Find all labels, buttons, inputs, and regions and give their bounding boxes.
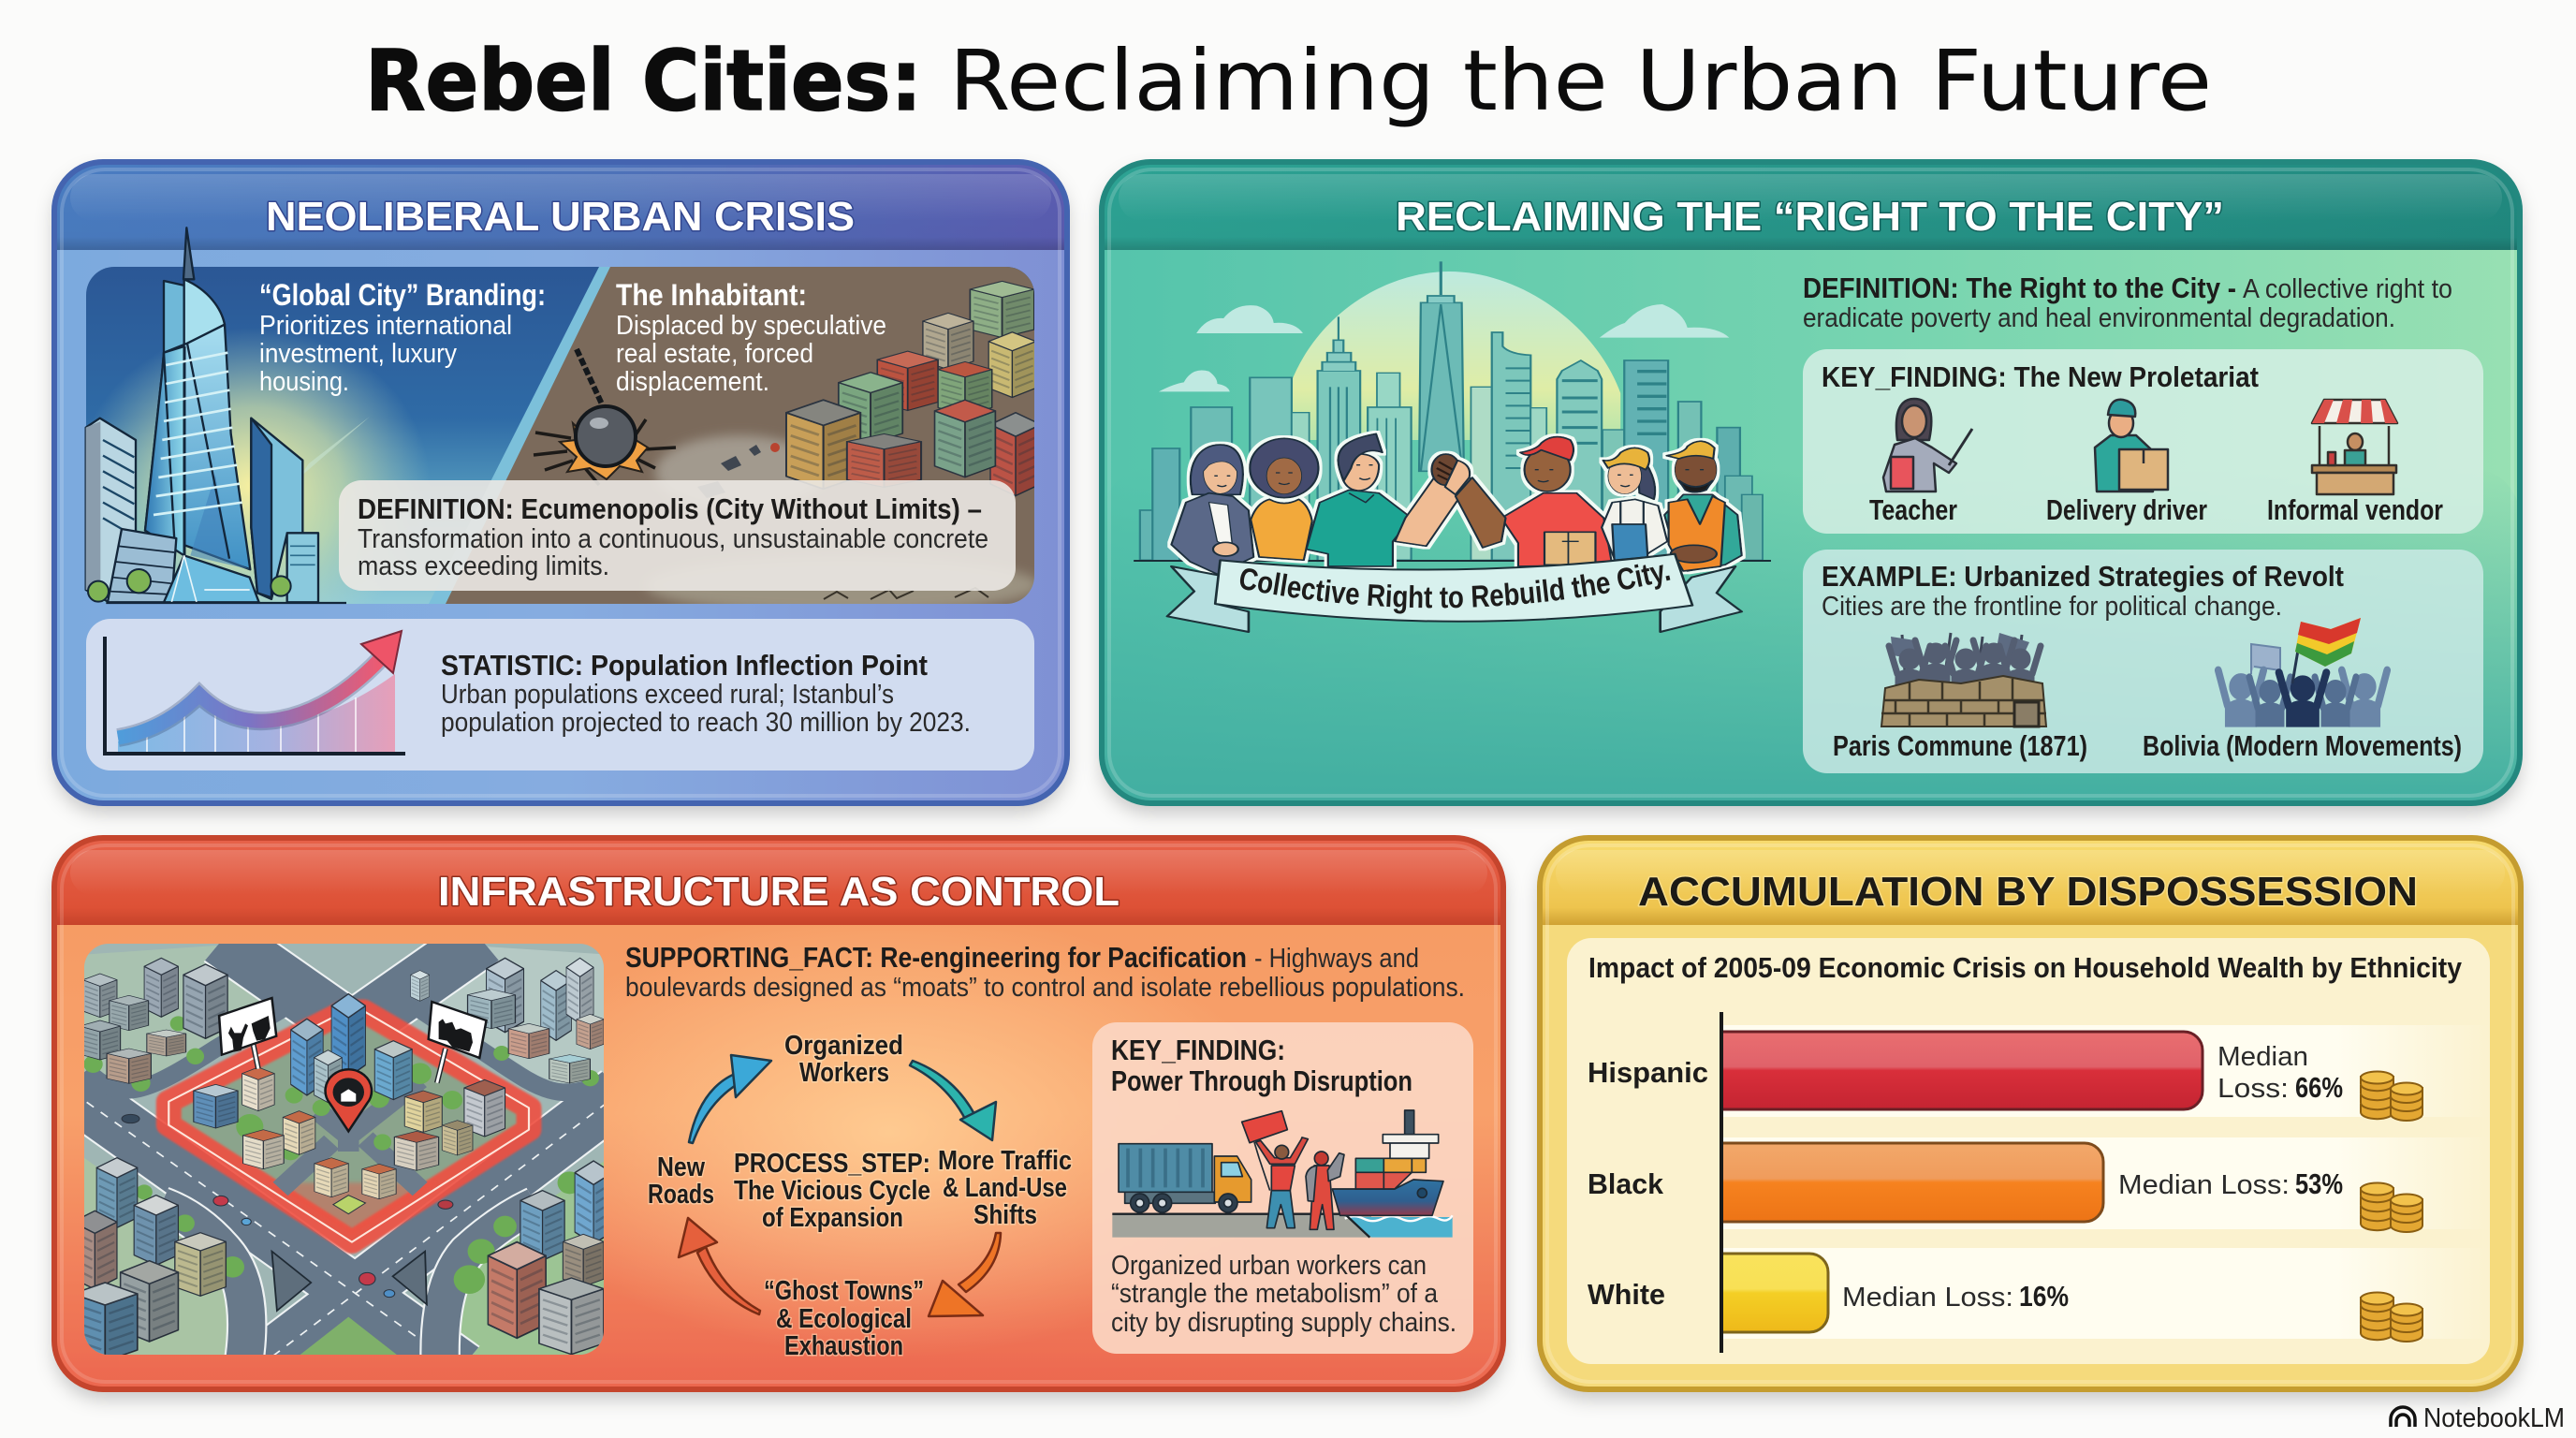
banner ribbon [1167,554,1742,632]
bar: black: Black [1588,1167,1664,1200]
bar: white: White [1588,1278,1665,1311]
step: ghost towns [764,1276,924,1361]
icon: delivery driver [2095,400,2168,492]
text: global city branding: investment, luxury [259,339,457,369]
ground cracks [824,588,988,599]
clasped hands [1431,454,1470,494]
card: urbanized strategies of revolt: Cities are the frontline for political change. [1822,592,2282,622]
illustration: city map with highway moat [73,936,621,1369]
callout: ecumenopolis definition: Transformation into a continuous, unsustainable concrete [358,524,988,554]
text: pacification supporting fact: SUPPORTING_FACT: Re-engineering for Pacification [625,941,1247,974]
label: informal vendor: Informal vendor [2267,493,2443,526]
cycle centre label: The Vicious Cycle [734,1176,930,1206]
step: more traffic: & Land-Use [943,1173,1067,1203]
card: power through disruption: Organized urban workers can [1111,1251,1427,1281]
bar: hispanic [1588,1032,2343,1109]
card: power through disruption [1092,1022,1473,1354]
worker: woman in yellow [1250,438,1318,560]
bar: black [1588,1143,2343,1222]
panel: accumulation by dispossession [1540,838,2521,1389]
bar: hispanic: Hispanic [1588,1056,1708,1089]
interior streets [281,1079,420,1189]
axis [1720,1012,1723,1353]
title [365,32,2212,129]
ground line [1134,558,1771,564]
arrow: organized workers to more traffic [910,1061,996,1140]
icon: coins hispanic [2361,1071,2422,1121]
step: organized workers: Organized [784,1031,903,1061]
icon: paris commune barricade [1881,633,2046,726]
bar: hispanic: 66% [2295,1071,2343,1104]
text: the inhabitant: real estate, forced [616,339,813,369]
heading: neoliberal urban crisis: NEOLIBERAL URBAN CRISIS [266,194,855,240]
red moat zone [168,1011,529,1242]
card: power through disruption: Power Through Disruption [1111,1064,1412,1097]
card: urbanized strategies of revolt: EXAMPLE: Urbanized Strategies of Revolt [1822,560,2344,593]
panel: infrastructure as control [54,838,1503,1389]
triangle islands [271,1252,311,1311]
sun and clouds [1159,271,1729,440]
card: population statistic: STATISTIC: Population Inflection Point [441,649,928,682]
bar: white: Median Loss: [1842,1283,2013,1313]
heading: accumulation by dispossession: ACCUMULATION BY DISPOSSESSION [1638,869,2418,915]
text: global city branding: “Global City” Branding: [259,278,546,312]
arrow: more traffic to ghost towns [929,1233,1001,1316]
text: right to the city definition [1803,271,2452,333]
worker: construction worker [1664,441,1742,571]
workers group [1171,433,1742,574]
text: right to the city definition: eradicate poverty and heal environmental degradation. [1803,303,2395,333]
callout: ecumenopolis definition: mass exceeding limits. [358,551,609,581]
wrecking ball [534,349,676,485]
line chart: rising population [105,631,405,754]
label: teacher: Teacher [1869,493,1957,526]
banner text: Collective Right to Rebuild the City. [1239,564,1670,614]
heading: infrastructure as control: INFRASTRUCTURE AS CONTROL [438,869,1120,915]
text: the inhabitant: displacement. [616,367,769,397]
step: new roads: Roads [648,1180,714,1210]
bar: hispanic: Median [2217,1042,2308,1072]
cycle centre label [734,1149,930,1233]
light beam [303,418,369,474]
text: the inhabitant: The Inhabitant: [616,278,807,312]
callout: ecumenopolis definition: DEFINITION: Ecumenopolis (City Without Limits) – [358,492,982,525]
title: Rebel Cities: [365,32,922,129]
glass tower [86,227,346,603]
icon: bolivia crowd with flag [2218,618,2387,726]
worker: man in red polo [1456,437,1612,566]
callout: ecumenopolis definition [339,480,1016,591]
inner district block [180,1024,528,1228]
step: new roads: New [657,1152,705,1182]
text: global city branding: housing. [259,367,349,397]
icon: informal vendor [2312,400,2397,494]
slum houses [786,281,1041,496]
text: right to the city definition: A collective right to [2243,274,2452,304]
step: ghost towns: “Ghost Towns” [764,1276,924,1306]
illustration: skyline and workers [1134,261,1771,632]
arrow: ghost towns to new roads [679,1218,760,1314]
icon: coins white [2361,1292,2422,1342]
buildings [83,974,117,1018]
text: the inhabitant [616,278,886,397]
illustration: truck, workers and ship [1112,1110,1453,1238]
icon: teacher [1883,399,1972,492]
arrow: new roads to organized workers [689,1055,771,1143]
card: power through disruption: city by disrupting supply chains. [1111,1308,1456,1338]
trees [83,1016,599,1294]
card: power through disruption: “strangle the metabolism” of a [1111,1279,1439,1309]
text: the inhabitant: Displaced by speculative [616,311,886,341]
highway network [73,939,621,1369]
bar: white [1588,1254,2069,1332]
panel: neoliberal urban crisis [54,162,1067,803]
protest sign left [219,998,276,1069]
card: the new proletariat: KEY_FINDING: The New Proletariat [1822,360,2259,393]
card: population statistic: population projected to reach 30 million by 2023. [441,708,971,738]
worker: woman in blazer [1171,445,1253,574]
bar: hispanic: Loss: [2217,1074,2289,1104]
card: power through disruption: KEY_FINDING: [1111,1034,1285,1066]
protest sign right [429,1002,487,1083]
skyline [1140,261,1763,561]
card: the new proletariat [1803,349,2483,534]
bar: white: 16% [2019,1280,2069,1313]
bar: black: Median Loss: [2118,1170,2290,1200]
row bands [1722,1025,2490,1339]
card: population statistic [86,619,1034,770]
text: pacification supporting fact: boulevards designed as “moats” to control and isolate rebellious populations. [625,973,1465,1003]
step: more traffic: Shifts [973,1200,1037,1230]
label: delivery driver: Delivery driver [2046,493,2207,526]
step: organized workers [784,1031,903,1088]
step: more traffic: More Traffic [938,1146,1072,1176]
card: urbanized strategies of revolt [1803,550,2483,773]
cycle diagram: the vicious cycle [648,1031,1072,1361]
rubble pieces [697,445,761,498]
text: global city branding: Prioritizes international [259,311,512,341]
green blocks [84,1158,227,1355]
chart title: Impact of 2005-09 Economic Crisis on Household Wealth by Ethnicity [1588,951,2463,984]
label: bolivia: Bolivia (Modern Movements) [2143,729,2462,762]
glow behind tower [101,334,421,602]
text: right to the city definition: DEFINITION: The Right to the City - [1803,271,2236,304]
card: population statistic: Urban populations exceed rural; Istanbul’s [441,680,894,710]
cycle centre label: of Expansion [762,1203,903,1233]
text: global city branding [259,278,546,397]
title: Reclaiming the Urban Future [949,32,2212,129]
panel: reclaiming the right to the city [1092,159,2529,822]
worker: woman in overalls [1602,448,1667,560]
step: new roads [648,1152,714,1210]
split image: global city vs inhabitant [86,267,1034,604]
heading: right to the city: RECLAIMING THE “RIGHT TO THE CITY” [1396,194,2224,240]
cars [122,1114,453,1298]
step: organized workers: Workers [799,1058,889,1088]
icon: coins black [2361,1183,2422,1232]
cycle centre label: PROCESS_STEP: [734,1149,930,1179]
location pin [326,1069,372,1131]
text: pacification supporting fact: - Highways and [1254,944,1419,974]
text: pacification supporting fact [625,941,1465,1003]
worker: man in teal polo [1307,433,1472,566]
rubble area [651,431,796,480]
step: more traffic [938,1146,1072,1230]
brown displaced side [442,267,1034,604]
bar: black: 53% [2295,1167,2343,1200]
notebooklm logo: NotebookLM [2423,1403,2565,1433]
bar chart: household wealth loss by ethnicity [1567,938,2490,1364]
step: ghost towns: Exhaustion [784,1331,903,1361]
label: paris commune: Paris Commune (1871) [1833,729,2087,762]
step: ghost towns: & Ecological [776,1304,912,1334]
